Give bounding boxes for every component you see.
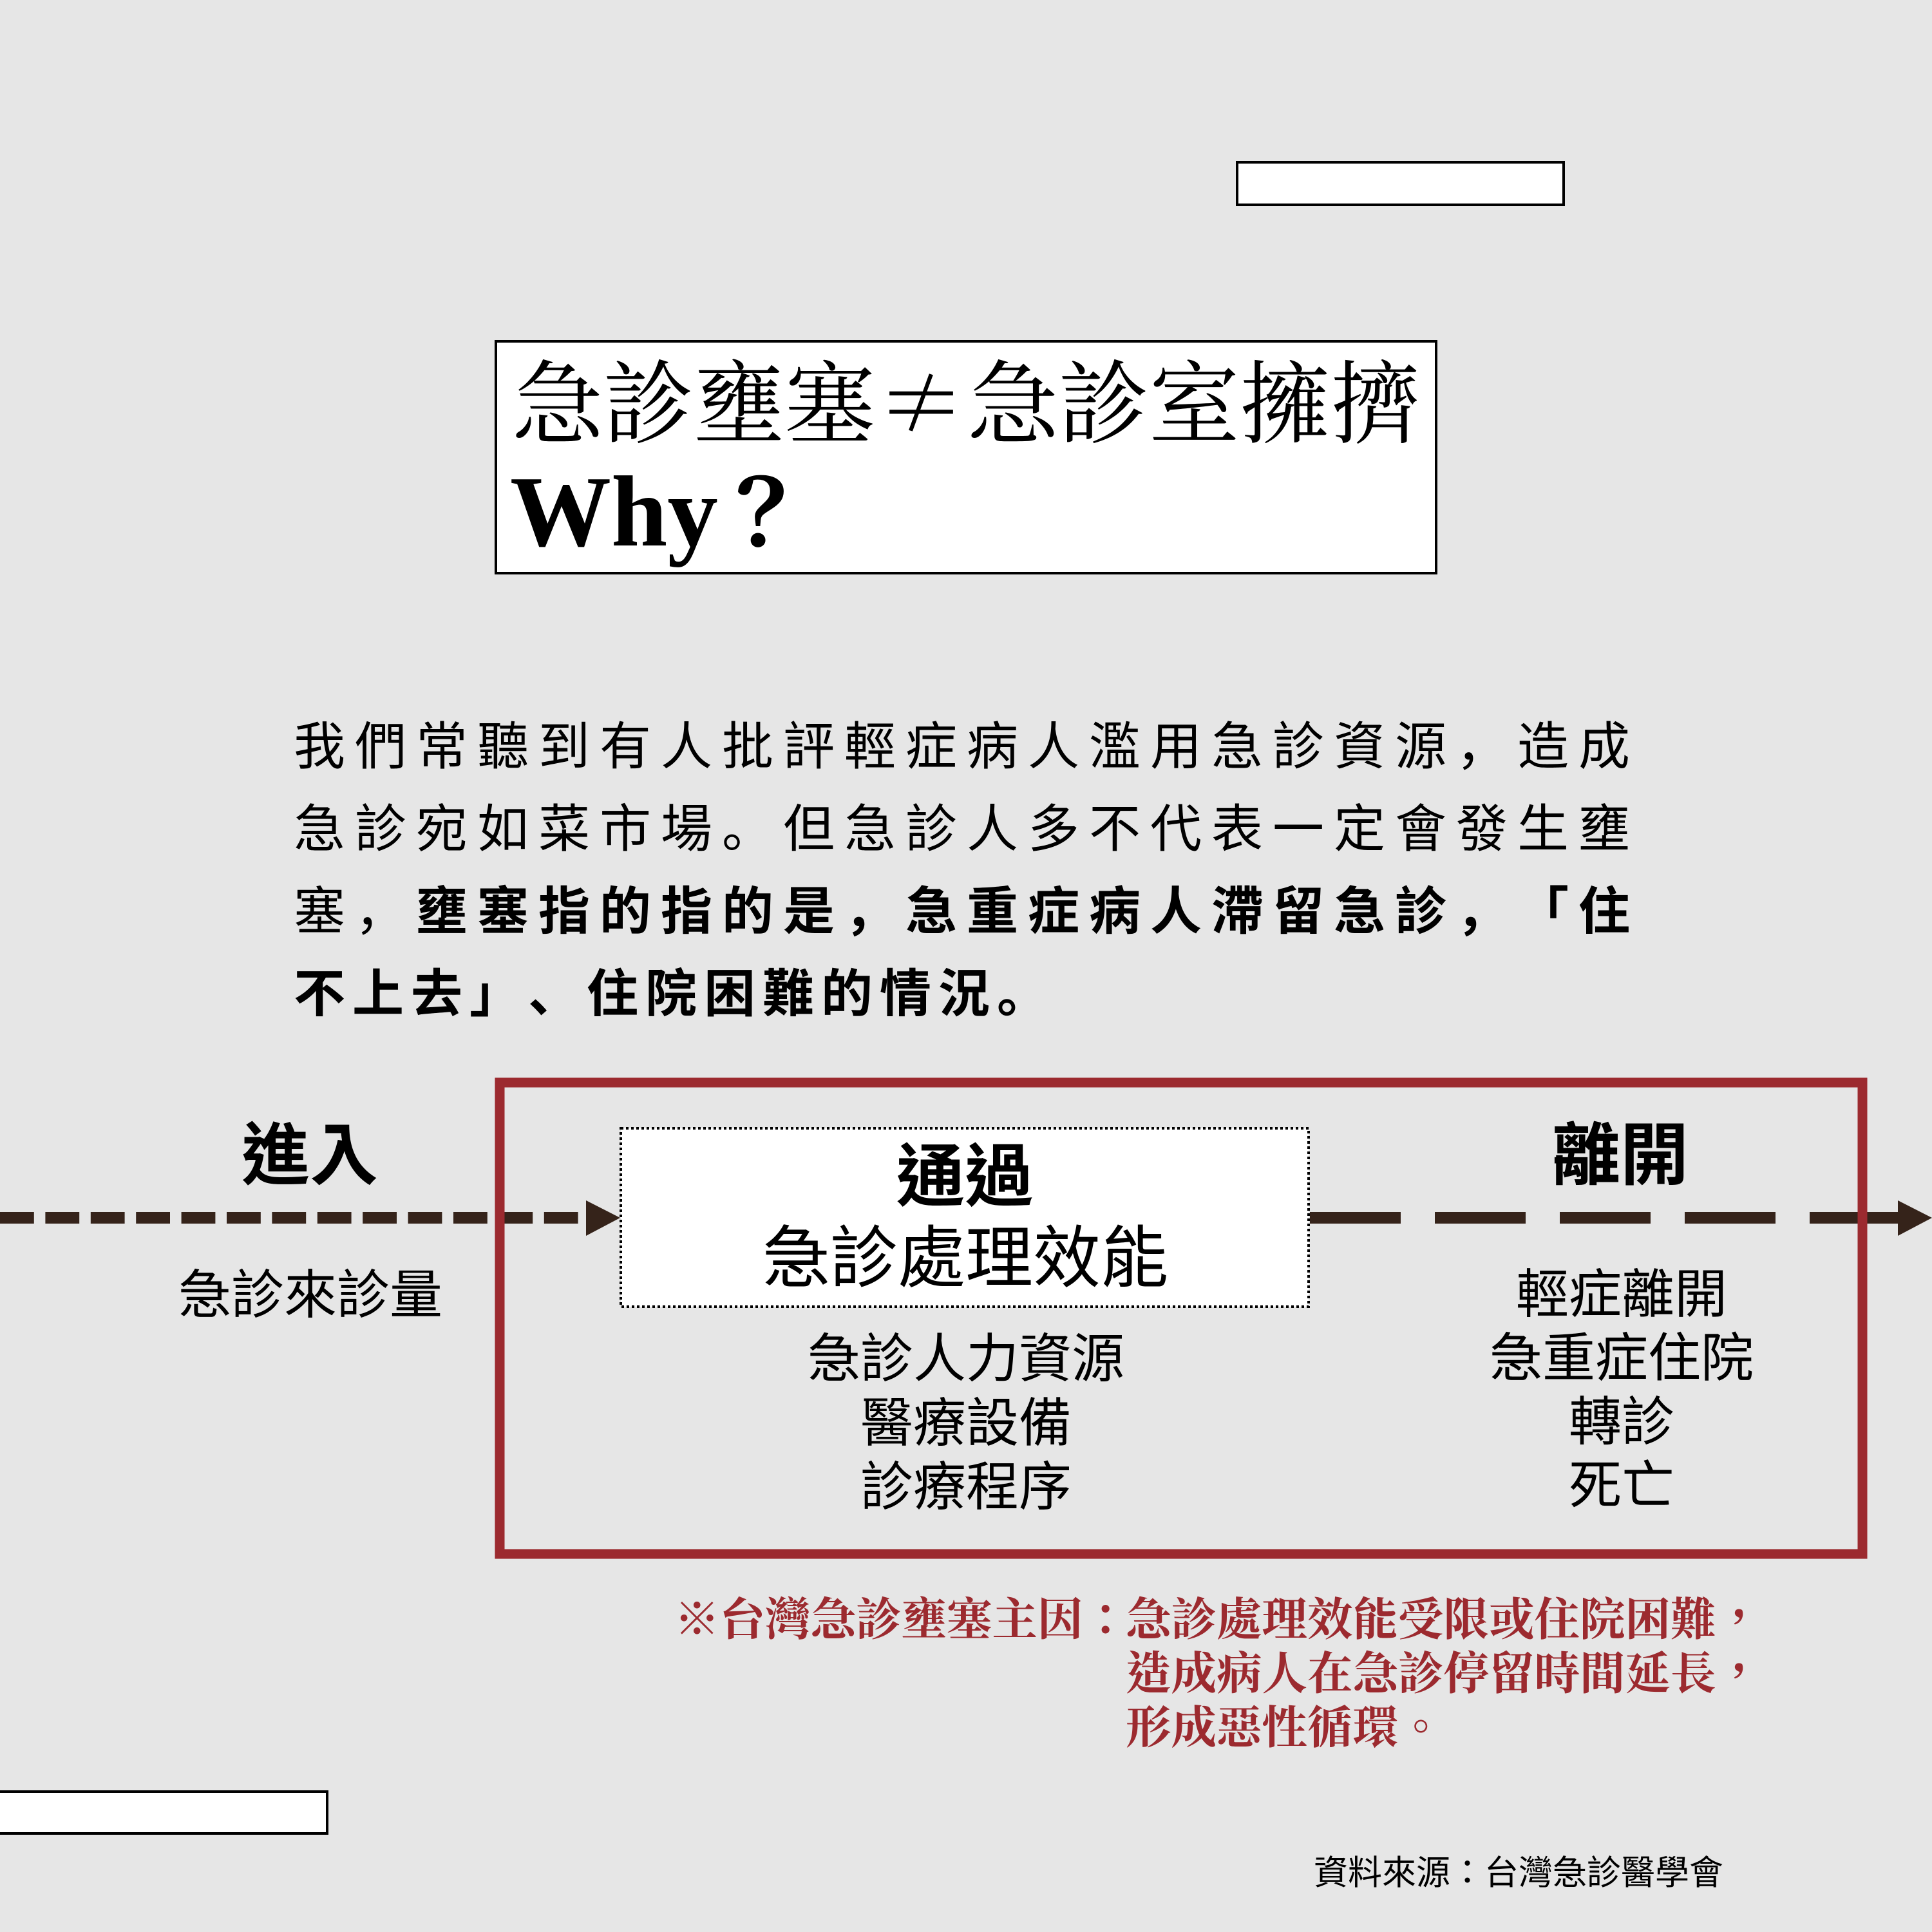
- heading: 進入: 進入: [242, 1118, 378, 1194]
- exit outcomes list: [1490, 1265, 1754, 1515]
- top blank white box: [1236, 161, 1565, 206]
- intro paragraph: 不上去」、住院困難的情況。: [294, 965, 1056, 1023]
- callout body: 形成惡性循環。: [1126, 1703, 1444, 1754]
- callout lead-in: ※台灣急診壅塞主因：: [674, 1595, 1128, 1645]
- callout: main cause of ED congestion in Taiwan: [674, 1595, 1761, 1754]
- title line: 急診壅塞≠急診室擁擠: ≠: [876, 332, 967, 462]
- callout body: [1126, 1595, 1761, 1754]
- throughput factors list: 診療程序: [860, 1458, 1072, 1517]
- title panel: [495, 340, 1437, 574]
- callout body: 急診處理效能受限或住院困難，: [1126, 1595, 1761, 1645]
- heading: 離開: 離開: [1552, 1118, 1689, 1194]
- text: 急診來診量: 急診來診量: [178, 1266, 442, 1325]
- intro paragraph: 急診宛如菜市場。但急診人多不代表一定會發生壅: [294, 800, 1637, 858]
- text: 急診處理效能: 急診處理效能: [762, 1221, 1168, 1296]
- dotted white box: throughput: [621, 1128, 1309, 1307]
- title line: Why？: Why？: [510, 455, 807, 567]
- red frame: congestion zone: [500, 1083, 1862, 1554]
- bottom blank white box: [0, 1790, 328, 1835]
- intro paragraph: 塞，壅塞指的指的是，急重症病人滯留急診，「住: [294, 883, 1637, 940]
- heading: 通過: 通過: [896, 1139, 1033, 1215]
- throughput factors list: 急診人力資源: [808, 1330, 1124, 1388]
- title line: 急診壅塞≠急診室擁擠: 急診壅塞 急診室擁擠: [512, 332, 1421, 462]
- source note: 資料來源：台灣急診醫學會: [1314, 1854, 1723, 1892]
- exit outcomes list: 轉診: [1569, 1393, 1674, 1452]
- arrow: leaving flow dashed line: [1310, 1200, 1932, 1236]
- intro paragraph: [294, 718, 1637, 1023]
- arrow: entering flow dashed line: [0, 1200, 620, 1236]
- callout body: 造成病人在急診停留時間延長，: [1126, 1649, 1761, 1700]
- throughput factors list: 醫療設備: [860, 1394, 1072, 1453]
- intro paragraph: 我們常聽到有人批評輕症病人濫用急診資源，造成: [294, 718, 1637, 775]
- exit outcomes list: 輕症離開: [1516, 1265, 1727, 1324]
- exit outcomes list: 急重症住院: [1490, 1329, 1754, 1388]
- throughput factors list: [808, 1330, 1124, 1517]
- exit outcomes list: 死亡: [1569, 1457, 1674, 1515]
